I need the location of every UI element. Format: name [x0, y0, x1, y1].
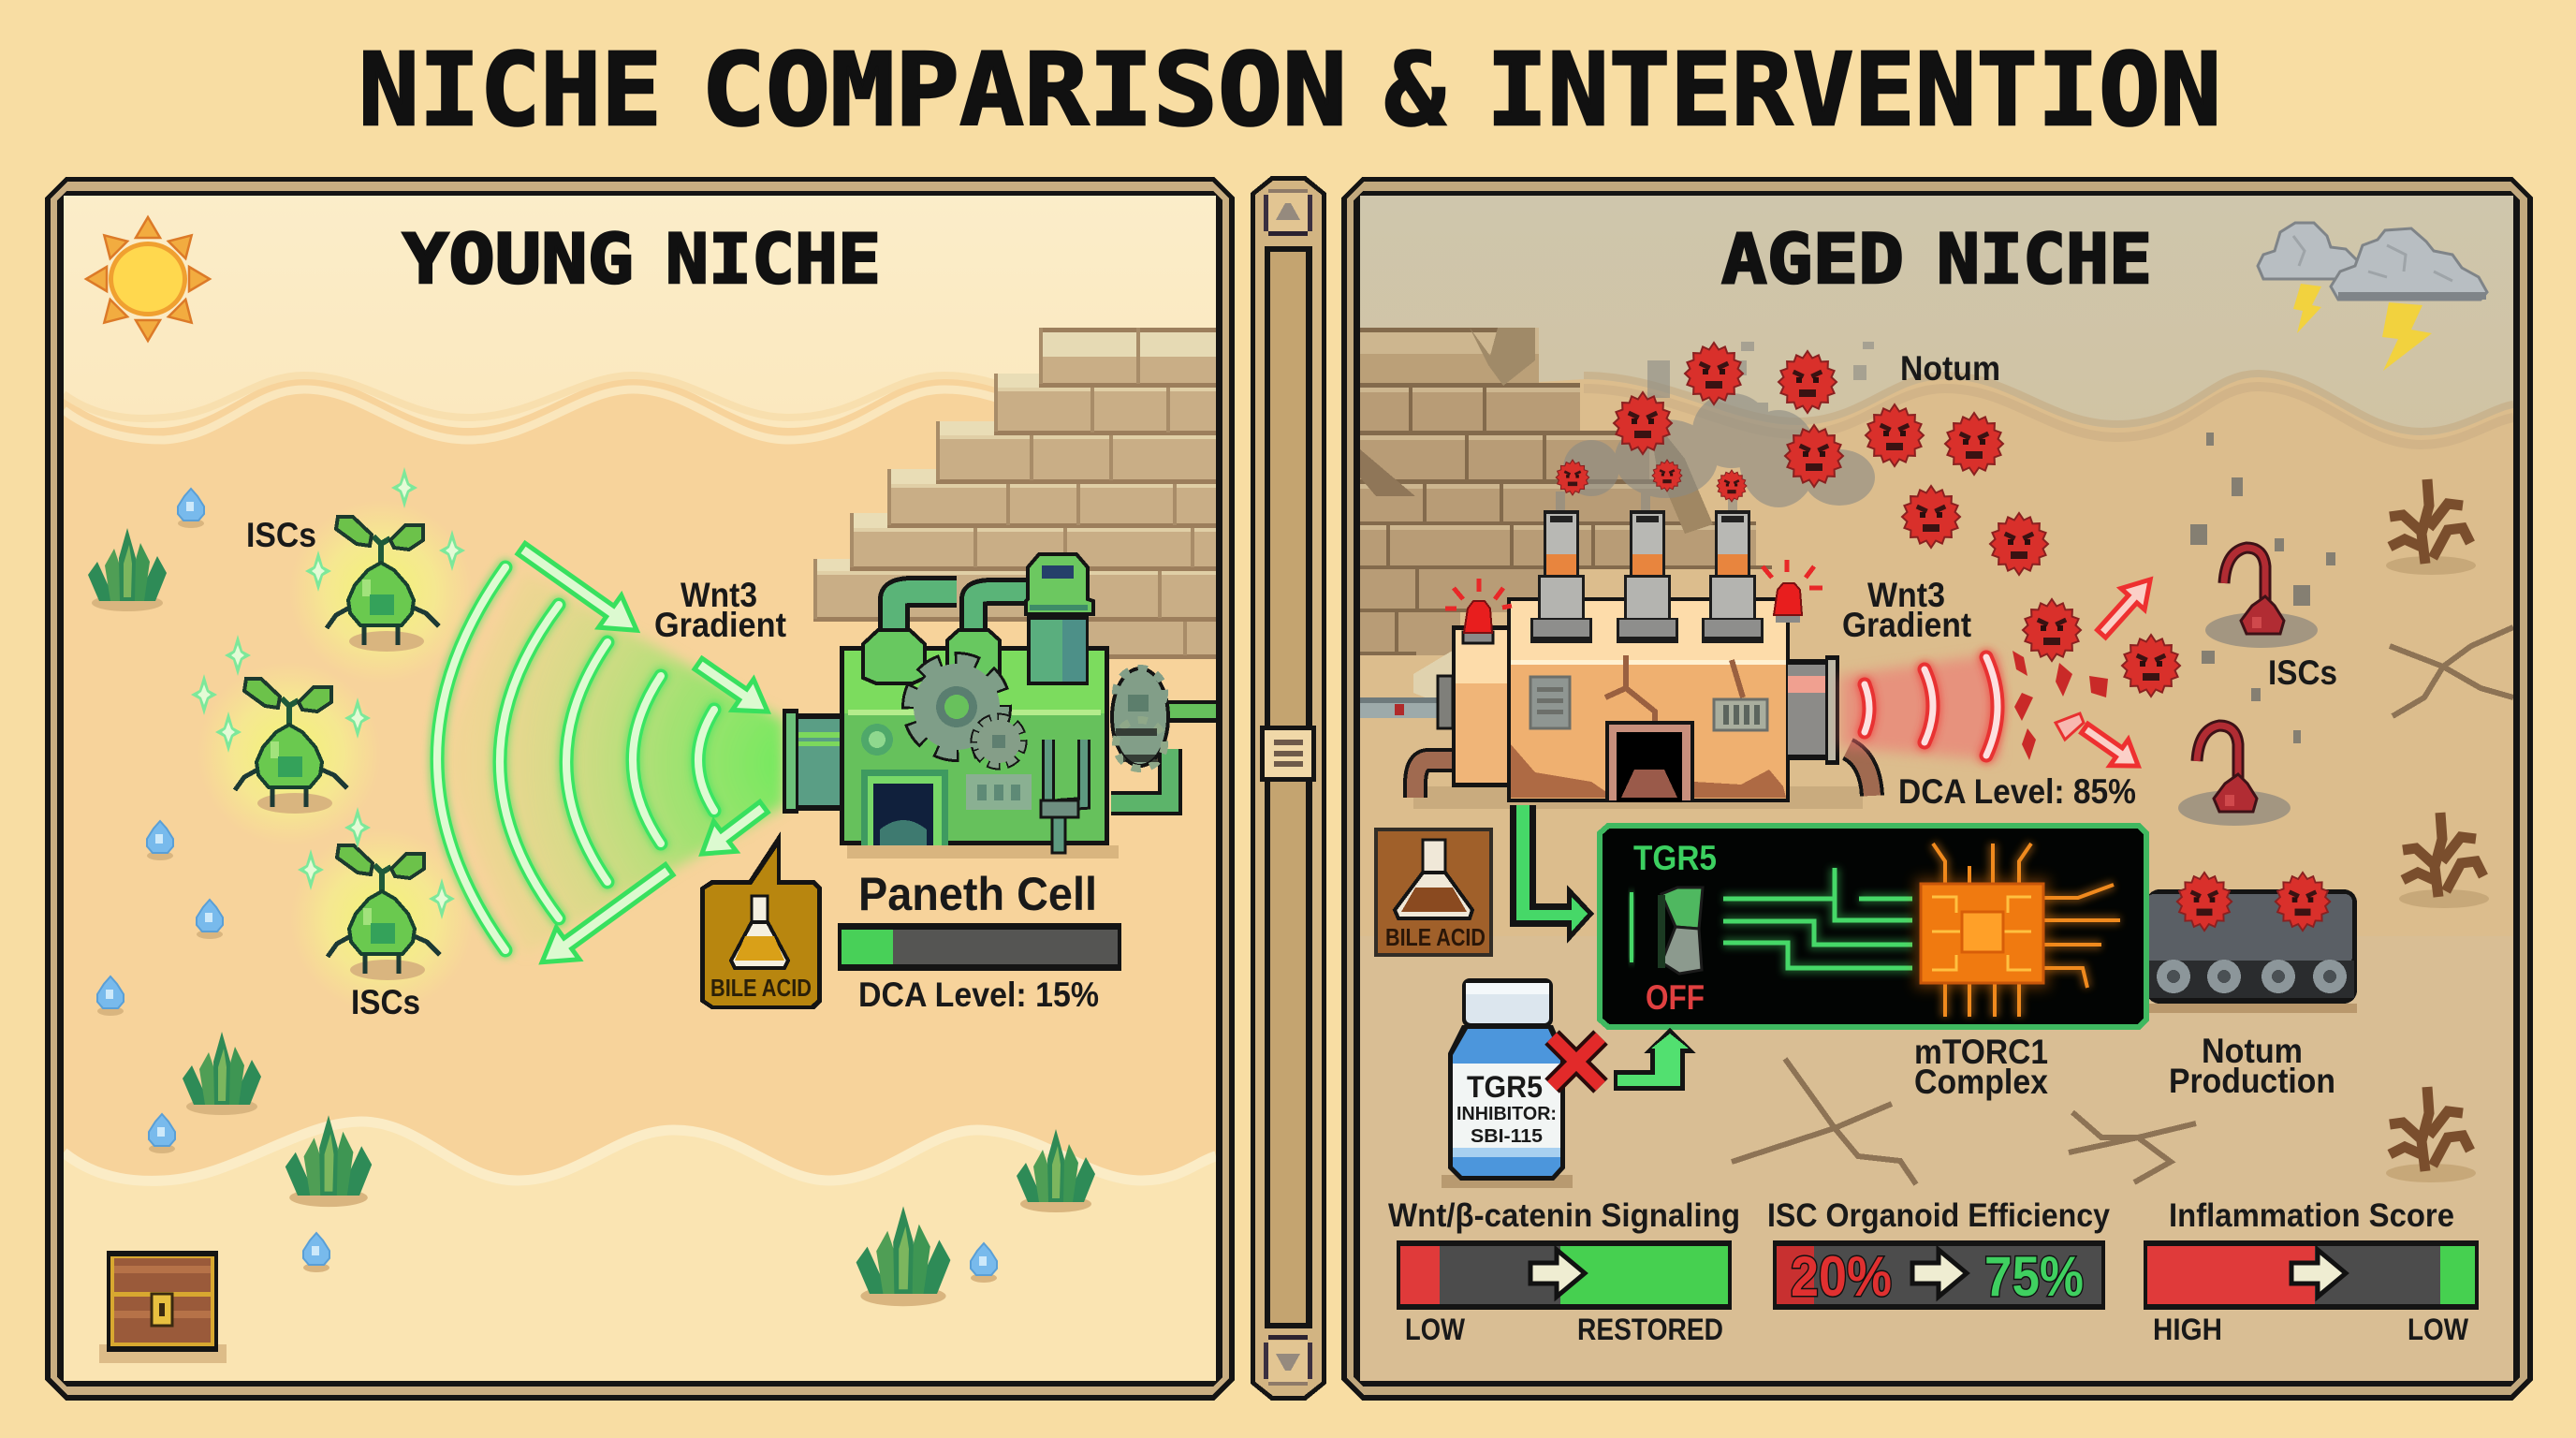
- down button: [1264, 1335, 1312, 1386]
- bile acid tag: [700, 831, 822, 1009]
- orange traces: [1933, 844, 2120, 1017]
- smoke plumes: [1556, 342, 1875, 512]
- label: bottle text: SBI-115: [1471, 1126, 1543, 1147]
- metric: Wnt signaling: LOW: [1405, 1313, 1466, 1346]
- door and vents: [1530, 677, 1767, 802]
- label: ISCs top: ISCs: [246, 516, 316, 554]
- debris: [2190, 433, 2335, 743]
- bile acid box: [1374, 828, 1493, 957]
- panel: young niche: [45, 177, 1235, 1401]
- rusty side pipes: [1360, 676, 1872, 798]
- label: DCA level 15%: DCA Level: 15%: [858, 976, 1099, 1014]
- metric: ISC organoid efficiency: 75%: [1984, 1245, 2084, 1308]
- label: Wnt3 gradient aged: [1842, 576, 1971, 644]
- gears: [910, 660, 1022, 765]
- label: mTORC1 complex: Complex: [1914, 1063, 2048, 1101]
- body details: [861, 724, 1084, 853]
- panel: aged niche: [1341, 177, 2533, 1401]
- up button: [1264, 189, 1312, 236]
- left nozzle: [783, 709, 841, 814]
- title: COMPARISON: [701, 33, 1347, 149]
- sun icon: [86, 217, 210, 341]
- gradient arrows: [510, 533, 778, 978]
- label: Wnt3 gradient: Wnt3: [681, 576, 757, 614]
- label: switch off: OFF: [1646, 978, 1705, 1017]
- inhibitor bottle: [1442, 978, 1573, 1188]
- label: DCA level 85%: DCA Level: 85%: [1898, 772, 2136, 811]
- brick wall: [813, 328, 1216, 659]
- heading: aged niche: AGED: [1721, 220, 1904, 300]
- withered ISCs: [2178, 548, 2318, 826]
- label: bottle text: [1456, 1070, 1557, 1147]
- right gear assembly: [1110, 667, 1216, 803]
- label: bottle text: INHIBITOR:: [1456, 1104, 1557, 1124]
- heading: young niche: NICHE: [666, 220, 881, 300]
- notum on conveyor: [2177, 873, 2330, 931]
- green arrow: inhibitor to switch: [1614, 1028, 1696, 1091]
- aged factory: [1360, 510, 1872, 809]
- cracked ground: [1360, 374, 2513, 1381]
- label: bile acid aged: BILE ACID: [1385, 923, 1486, 951]
- title: &: [1384, 33, 1446, 149]
- label: notum production: [2169, 1032, 2335, 1100]
- metric: inflammation score: HIGH: [2153, 1313, 2222, 1346]
- label: Notum: Notum: [1900, 349, 2000, 388]
- notum particles: [1556, 343, 2180, 697]
- storm clouds: [2258, 223, 2487, 371]
- label: mTORC1 complex: mTORC1: [1914, 1033, 2048, 1071]
- TGR5 mTORC1 circuit panel: [1600, 826, 2146, 1027]
- water drops: [97, 489, 997, 1283]
- metric: ISC organoid efficiency: [1767, 1197, 2110, 1310]
- label: ISCs bottom: ISCs: [351, 983, 420, 1021]
- treasure chest: [99, 1251, 227, 1363]
- crumbling wall: [1360, 328, 1772, 712]
- metric: inflammation score: LOW: [2408, 1313, 2469, 1346]
- chimneys: [1530, 510, 1764, 643]
- label: TGR5 switch: TGR5: [1633, 839, 1717, 877]
- title: NICHE: [359, 33, 662, 149]
- ground cracks: [1732, 627, 2513, 1184]
- label: Wnt3 gradient aged: Wnt3: [1867, 576, 1945, 614]
- green traces: [1723, 868, 1912, 968]
- label: Paneth Cell: Paneth Cell: [858, 868, 1097, 920]
- output nozzle: [1786, 655, 1839, 765]
- Wnt3 gradient waves: [437, 567, 784, 955]
- label: ISCs aged: ISCs: [2268, 653, 2337, 692]
- metric: Wnt signaling: [1388, 1197, 1740, 1346]
- scroll track: [1265, 246, 1312, 1328]
- tanks and pipes: [863, 554, 1093, 683]
- machine body: [840, 646, 1109, 845]
- metric: Wnt signaling: RESTORED: [1577, 1313, 1723, 1346]
- title: INTERVENTION: [1486, 33, 2221, 149]
- scroll thumb: [1260, 726, 1316, 782]
- conveyor belt: [2146, 889, 2357, 1013]
- shattered gradient shards: [2012, 569, 2162, 779]
- label: notum production: Notum: [2202, 1032, 2303, 1070]
- label: Wnt3 gradient: [655, 582, 786, 637]
- metric: Wnt signaling: Wnt/β-catenin Signaling: [1388, 1197, 1740, 1234]
- upper sand dunes: [64, 375, 1216, 1217]
- scroll bar divider: [1251, 176, 1326, 1401]
- label: mTORC1 complex: [1914, 1033, 2048, 1101]
- green arrow: bile acid to TGR5: [1510, 805, 1594, 944]
- label: Wnt3 gradient: Gradient: [654, 606, 786, 644]
- label: notum production: Production: [2169, 1062, 2335, 1100]
- switch: [1630, 888, 1703, 974]
- lower sand dunes: [64, 1122, 1216, 1381]
- desert shrubs: [88, 528, 1095, 1306]
- red Wnt3 beam: [1840, 653, 1998, 760]
- ISC sprouts: [213, 515, 470, 996]
- dead plants: [2386, 479, 2489, 1182]
- metric: inflammation score: Inflammation Score: [2169, 1197, 2454, 1234]
- red X: [1552, 1037, 1601, 1086]
- factory body: [1452, 625, 1512, 787]
- mTORC1 chip: [1915, 878, 2049, 989]
- metric: inflammation score: [2144, 1197, 2479, 1346]
- Paneth cell machine: [783, 554, 1216, 858]
- alarm lights: [1445, 560, 1822, 643]
- heading: young niche: YOUNG: [402, 220, 634, 300]
- label: bottle text: TGR5: [1467, 1070, 1543, 1104]
- sparkles: [191, 467, 465, 919]
- metric: ISC organoid efficiency: ISC Organoid Efficiency: [1767, 1197, 2110, 1234]
- label: Wnt3 gradient aged: Gradient: [1842, 606, 1971, 644]
- metric: ISC organoid efficiency: 20%: [1791, 1245, 1892, 1308]
- heading: aged niche: NICHE: [1937, 220, 2152, 300]
- label: bile acid: BILE ACID: [710, 974, 812, 1002]
- DCA level bar: [838, 923, 1121, 971]
